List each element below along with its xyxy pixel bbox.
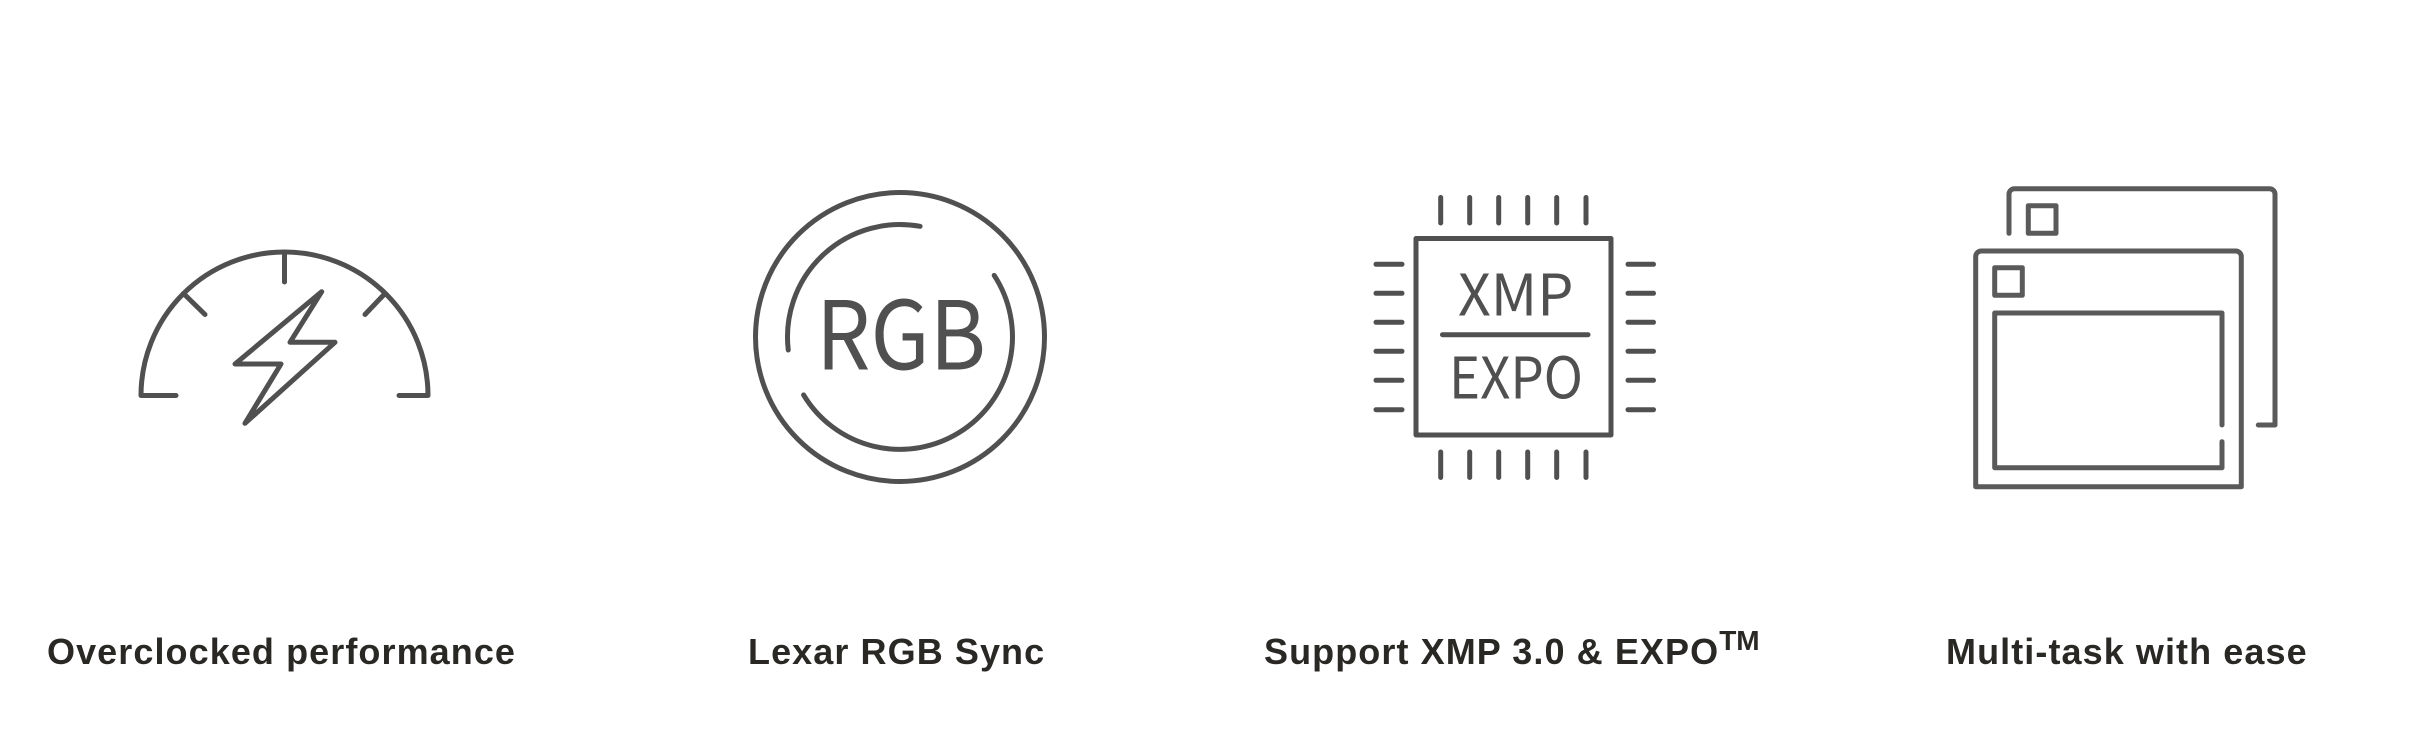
label: overclocked performance: Overclocked performance [47, 631, 516, 672]
icon: RGB circle [756, 192, 1044, 482]
icon: overlapping windows [1976, 189, 2275, 487]
label: Support XMP 3.0 and EXPO TM: TM [1719, 625, 1760, 656]
icon: XMP and EXPO chip: XMP [1458, 249, 1574, 333]
icon: speedometer with lightning bolt [141, 252, 428, 423]
label: multi-task with ease: Multi-task with ease [1946, 631, 2308, 672]
icon: RGB circle: RGB [816, 260, 986, 398]
icon: XMP and EXPO chip [1376, 198, 1654, 478]
label: Support XMP 3.0 and EXPO TM: Support XMP 3.0 & EXPO [1264, 631, 1719, 672]
icon: XMP and EXPO chip: EXPO [1449, 331, 1583, 415]
label: Lexar RGB Sync: Lexar RGB Sync [748, 631, 1045, 672]
icon: lightning bolt [235, 292, 335, 423]
